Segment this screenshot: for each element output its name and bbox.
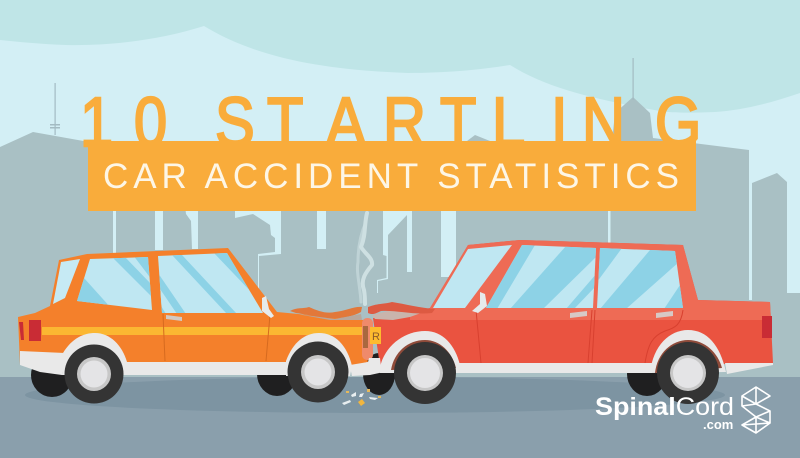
front door window xyxy=(484,244,598,310)
door seams xyxy=(163,314,270,361)
red car xyxy=(368,240,773,404)
door seams xyxy=(476,310,683,363)
city skyline xyxy=(0,58,800,380)
red car upper band xyxy=(410,240,771,320)
orange car body xyxy=(18,248,368,366)
logo subtext: .com xyxy=(703,417,733,432)
logo icon xyxy=(742,387,770,433)
crushed bumper xyxy=(350,358,387,376)
door handle xyxy=(166,315,182,321)
rear door window xyxy=(77,257,152,310)
crash point xyxy=(342,318,387,406)
front wheel xyxy=(288,342,348,402)
yellow stripe xyxy=(42,327,363,335)
light gaps between buildings xyxy=(113,205,610,293)
tail light xyxy=(762,316,772,338)
tail lights xyxy=(19,320,41,341)
rear small window xyxy=(53,259,80,304)
rear door window xyxy=(597,248,683,308)
ground shadow xyxy=(25,377,725,413)
orange car xyxy=(18,248,368,404)
front wheel arch xyxy=(286,333,352,376)
front wheel arch xyxy=(380,331,460,373)
logo: SpinalCord.com xyxy=(595,387,770,433)
rear wheel arch xyxy=(650,330,726,373)
red car body xyxy=(373,240,773,366)
front wheel xyxy=(394,342,456,404)
debris xyxy=(342,389,381,406)
smoke xyxy=(357,213,372,304)
license plate xyxy=(370,327,381,344)
clouds xyxy=(0,0,800,113)
title: 10 STARTLING: 10 STARTLING xyxy=(80,82,701,161)
front door window xyxy=(158,253,263,313)
door handles xyxy=(570,311,673,318)
crash point: R xyxy=(372,331,380,343)
rear wheel arch xyxy=(62,333,127,375)
rear wheel xyxy=(657,342,719,404)
logo wordmark: SpinalCord xyxy=(595,393,734,421)
white rocker and bumper xyxy=(458,363,773,374)
far wheels xyxy=(31,352,667,397)
subtitle: CAR ACCIDENT STATISTICS xyxy=(103,157,679,196)
white rocker and bumper xyxy=(20,351,368,376)
side mirror xyxy=(472,292,487,313)
ground xyxy=(0,377,800,458)
crumpled hood xyxy=(290,307,362,318)
side mirror xyxy=(262,296,274,318)
crumple glow xyxy=(362,318,373,360)
rear wheel xyxy=(64,344,124,404)
windshield xyxy=(430,244,515,309)
banner xyxy=(88,141,696,211)
crumple shadow xyxy=(363,326,368,348)
crumpled red hood xyxy=(368,302,435,320)
